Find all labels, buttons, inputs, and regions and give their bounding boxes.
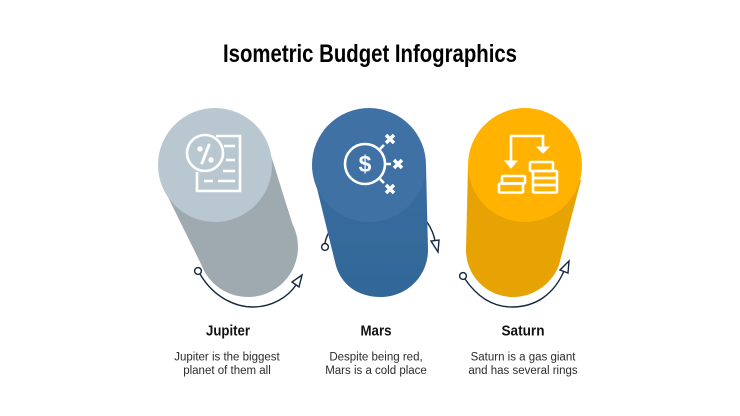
panel: Mars [312,108,439,297]
panel: Jupiter [158,108,302,307]
cylinder body [163,146,298,297]
icon: dollar with crosses [345,135,402,193]
heading: Mars: Mars [360,322,392,340]
arrow: Jupiter curved [195,268,302,307]
text: Jupiter description: Jupiter is the biggest [174,352,281,364]
text: Saturn description: and has several rings [468,365,578,377]
text: Mars description: Mars is a cold place [325,365,427,377]
arrow: Mars curved [322,222,439,252]
arrow: Saturn curved [460,261,569,307]
circle top [468,108,582,222]
heading: Saturn: Saturn [502,322,544,340]
text: Jupiter description: planet of them all [183,365,271,377]
icon: percent document [187,135,240,191]
cylinder body [312,165,428,297]
cylinder body [466,165,581,297]
icon: coin stacks [499,136,557,192]
text: Mars description: Despite being red, [329,352,423,364]
panel: Saturn [460,108,582,307]
heading: Jupiter: Jupiter [206,322,250,340]
circle top [158,108,272,222]
icon: dollar with crosses: $ [359,151,372,177]
text: Saturn description: Saturn is a gas giant [471,352,576,364]
title: Isometric Budget Infographics [223,40,517,68]
circle top [312,108,426,222]
